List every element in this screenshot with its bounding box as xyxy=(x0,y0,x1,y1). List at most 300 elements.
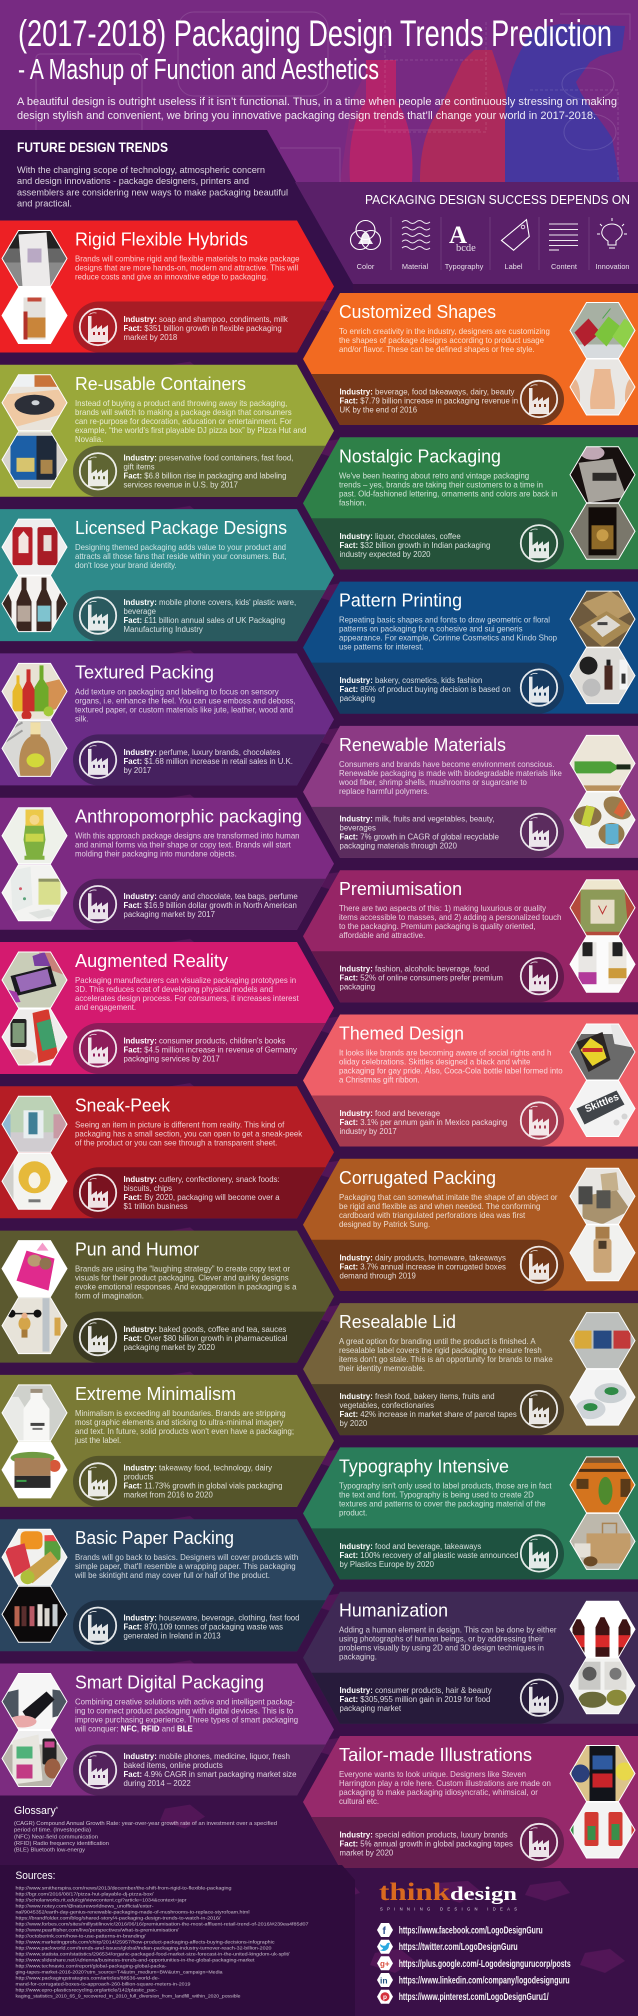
description: To enrich creativity in the industry, designers are customizing xyxy=(339,327,550,336)
description: of the product or you can see through a transparent sheet. xyxy=(75,1138,277,1147)
industry and fact xyxy=(124,748,293,775)
description: Renewable packaging is made with biodegradable materials like xyxy=(339,769,562,778)
heading: Themed Design xyxy=(339,1024,464,1044)
description: designed by Patrick Sung. xyxy=(339,1220,430,1229)
description: Brands are using the “laughing strategy” to create copy text or xyxy=(75,1265,290,1274)
icon: factory xyxy=(80,1030,116,1067)
industry and fact xyxy=(124,1464,282,1500)
description: a Christmas gift ribbon. xyxy=(339,1076,420,1084)
google plus: g+ xyxy=(380,1960,390,1968)
icon: factory xyxy=(521,1680,557,1716)
intro paragraph: design stylish and convenient, we bring you innovative packaging design trends that’ll change your world in 2017-2018. xyxy=(17,110,596,122)
icon: content xyxy=(549,224,578,271)
description xyxy=(339,471,557,507)
source links: http://www.slideshare.net/Adrienna/business-trends-and-opportunities-in-the-global-packaging-market xyxy=(16,1957,255,1962)
photo: coffee bags xyxy=(570,936,636,992)
industry and fact: packaging services by 2017 xyxy=(124,1054,220,1064)
icon: color xyxy=(350,220,380,271)
heading: sources: Sources: xyxy=(16,1870,56,1882)
panel: Pattern Printing xyxy=(303,582,638,714)
industry and fact xyxy=(124,454,293,490)
source links: http://www.pearlfisher.com/live/perspectives/what-is-premiumisation/ xyxy=(16,1927,179,1932)
industry and fact: Industry: baked goods, coffee and tea, sauces xyxy=(124,1325,286,1334)
photo: patterned box xyxy=(570,880,636,936)
industry and fact: Fact: 11.73% growth in global vials packaging xyxy=(124,1482,282,1491)
industry and fact: by Plastics Europe by 2020 xyxy=(340,1560,435,1569)
icon: factory xyxy=(521,958,557,994)
description: using photographs of human beings, or by addressing their xyxy=(339,1635,544,1644)
photo: beer bottles xyxy=(0,576,70,632)
icon: factory xyxy=(521,525,557,562)
photo: tall tan package xyxy=(570,1225,636,1281)
description: appearance. For example, Corinne Cosmetics and Kindo Shop xyxy=(339,634,558,643)
photo: fiber pods xyxy=(570,792,636,848)
description xyxy=(75,543,286,570)
photo: vinyl pizza box xyxy=(2,375,68,431)
panel: Corrugated Packing xyxy=(303,1159,638,1291)
photo: bottle in molded pulp xyxy=(570,735,636,791)
photo: black and gold box xyxy=(570,503,636,559)
source links: http://www.statista.com/statistics/296534/organic-packaged-food-market-size-forecast-in-the-united-kingdom-uk-split/ xyxy=(16,1951,290,1956)
industry and fact: Fact: $6.8 billion rise in packaging and labeling xyxy=(124,471,286,480)
icon: factory xyxy=(80,1319,116,1355)
text: future design trends intro xyxy=(17,164,288,208)
icon: factory xyxy=(521,1391,557,1427)
industry and fact: Fact: $1.68 million increase in retail sales in U.K. xyxy=(124,757,293,766)
panel: Sneak-Peek xyxy=(0,1086,334,1218)
description xyxy=(339,616,558,652)
panel: Themed Design xyxy=(303,1014,638,1146)
photo: white milk bottles xyxy=(2,1385,68,1441)
heading: Rigid Flexible Hybrids xyxy=(75,230,248,250)
industry and fact: Industry: houseware, beverage, clothing, fast food xyxy=(124,1614,299,1623)
description: textured paper, or custom materials like jute, leather, wood and xyxy=(75,705,293,714)
photo: yellow afro package xyxy=(2,1153,68,1209)
industry and fact: Industry: liquor, chocolates, coffee xyxy=(340,532,461,541)
heading: success factors: PACKAGING DESIGN SUCCESS DEPENDS ON xyxy=(365,193,630,207)
heading: Resealable Lid xyxy=(339,1312,456,1332)
industry and fact: vegetables, confectionaries xyxy=(340,1401,434,1410)
industry and fact: Industry: mobile phones, medicine, liquor, fresh xyxy=(124,1752,290,1761)
industry and fact: packaging xyxy=(340,694,375,703)
industry and fact: UK by the end of 2016 xyxy=(340,406,417,414)
description: A great option for branding until the product is finished. A xyxy=(339,1337,536,1346)
description: don't lose your brand identity. xyxy=(75,561,177,570)
industry and fact: biscuits, chips xyxy=(124,1184,172,1193)
photo: pouch on gradient xyxy=(2,230,68,286)
industry and fact: Manufacturing Industry xyxy=(124,625,203,634)
text: future design trends intro: and practical. xyxy=(17,198,72,208)
photo: cardboard cup carrier xyxy=(570,1168,636,1224)
description: packaging has a small section, you can open to get a sneak-peek xyxy=(75,1129,302,1138)
icon: factory xyxy=(80,742,116,778)
photo: nose-shaped packs xyxy=(570,359,636,415)
icon: label xyxy=(500,220,530,271)
panel: Customized Shapes xyxy=(303,293,638,425)
photo: juice packs xyxy=(570,302,636,358)
photo: bag on white xyxy=(2,288,68,344)
description: their identity memorable. xyxy=(339,1364,425,1373)
panel: Resealable Lid xyxy=(303,1303,638,1435)
description: Add texture on packaging and labeling to focus on sensory xyxy=(75,687,279,696)
icon: color: Color xyxy=(357,262,375,271)
description: will conquer: NFC, RFID and BLE xyxy=(74,1724,193,1734)
description: Instead of buying a product and throwing away its packaging, xyxy=(75,399,287,408)
heading: Smart Digital Packaging xyxy=(75,1672,264,1692)
industry and fact: Fact: $32 billion growth in Indian packaging xyxy=(340,541,490,550)
description xyxy=(75,254,300,282)
description: product. xyxy=(339,1508,367,1517)
panel: Extreme Minimalism xyxy=(0,1375,334,1507)
source links: http://www.packworld.com/trends-and-issues/global/indian-packaging-industry-turnover-reach-32-billion-2020 xyxy=(16,1945,272,1950)
industry and fact: Fact: £11 billion annual sales of UK Packaging xyxy=(124,616,285,625)
description: It looks like brands are becoming aware of social rights and h xyxy=(339,1048,551,1058)
photo: black and white skittles: Skittles xyxy=(584,1092,621,1115)
description: use patterns for interest. xyxy=(339,643,424,652)
description: can re-purpose for decoration, education or entertainment. For xyxy=(75,417,292,426)
panel: Humanization xyxy=(303,1592,638,1724)
panel: sources xyxy=(0,1865,355,2016)
source links: http://www.technavio.com/report/global-packaging-global-packa- xyxy=(16,1963,167,1968)
industry and fact: Fact: 3.1% per annum gain in Mexico packaging xyxy=(340,1118,507,1127)
text: future design trends intro: With the changing scope of technology, atmospheric concern xyxy=(17,164,265,175)
industry and fact xyxy=(340,1686,492,1713)
pinterest xyxy=(377,1990,549,2004)
panel: Typography Intensive xyxy=(303,1447,638,1579)
industry and fact: industry by 2017 xyxy=(340,1127,397,1136)
description xyxy=(75,832,300,859)
description xyxy=(339,1193,558,1229)
heading: Customized Shapes xyxy=(339,302,496,322)
heading: Renewable Materials xyxy=(339,735,506,755)
logo: think design: think xyxy=(379,1879,450,1906)
description: Consumers and brands have become environment conscious. xyxy=(339,760,554,769)
heading: Extreme Minimalism xyxy=(75,1384,236,1404)
description: past. Old-fashioned lettering, ornaments and colors are back in xyxy=(339,489,557,498)
industry and fact: $1 trillion business xyxy=(124,1202,188,1211)
description: affordable and attractive. xyxy=(339,931,425,940)
description: Brands will combine rigid and flexible materials to make package xyxy=(75,254,300,264)
icon: material xyxy=(402,220,430,271)
description: reduce costs and give an innovative edge to packaging. xyxy=(75,272,268,282)
photo: white lids xyxy=(570,1369,636,1425)
industry and fact: beverages xyxy=(340,824,376,833)
description: designs that are more hands-on, modern and attractive. This will xyxy=(75,264,298,272)
description xyxy=(339,327,550,354)
logo: think design: design xyxy=(450,1884,518,1905)
description: 3D. This reduces cost of developing physical models and xyxy=(75,985,273,994)
industry and fact: Fact: $351 billion growth in flexible packaging xyxy=(124,324,282,333)
photo: sandwich box xyxy=(2,1442,68,1498)
industry and fact: Industry: fresh food, bakery items, fruits and xyxy=(340,1392,495,1401)
industry and fact: Industry: food and beverage xyxy=(340,1109,440,1118)
photo: colored bottles xyxy=(2,663,68,720)
description: organs, i.e. enhance the feel. You can use emboss and deboss, xyxy=(75,696,296,705)
photo: framed boxes xyxy=(0,1096,68,1152)
background: purple header area xyxy=(0,0,638,182)
photo: paper takeaway bag xyxy=(570,1513,636,1569)
industry and fact xyxy=(340,532,490,559)
description: simple paper, that'll resemble a wrapping paper. This packaging xyxy=(75,1562,296,1571)
description: There are two aspects of this: 1) making luxurious or quality xyxy=(339,904,546,913)
industry and fact: Industry: perfume, luxury brands, chocolates xyxy=(124,748,280,757)
linkedin: in xyxy=(380,1976,388,1986)
description: replace harmful polymers. xyxy=(339,787,429,796)
panel: Anthropomorphic packaging xyxy=(0,798,334,930)
photo: hand with phone xyxy=(2,952,68,1008)
description xyxy=(74,1553,298,1580)
icon: typography: Typography xyxy=(445,262,484,271)
industry and fact: Fact: 4.9% CAGR in smart packaging market size xyxy=(124,1770,296,1779)
icon: innovation: Innovation xyxy=(595,262,630,271)
industry and fact: Fact: 52% of online consumers prefer premium xyxy=(340,974,503,983)
description: Packaging manufacturers can visualize packaging prototypes in xyxy=(75,976,296,985)
description: to the packaging. Premium packaging is quality oriented, xyxy=(339,922,536,931)
description xyxy=(74,1409,294,1445)
description: the shapes of package designs according to product usage xyxy=(339,336,545,345)
photo: three labeled trays xyxy=(570,1313,636,1369)
logo: think design xyxy=(379,1879,518,1912)
industry and fact xyxy=(124,1752,296,1788)
description xyxy=(74,1698,298,1734)
industry and fact: generated in Ireland in 2013 xyxy=(124,1632,221,1641)
industry and fact: Fact: 870,109 tonnes of packaging waste was xyxy=(124,1623,283,1632)
industry and fact: gift items xyxy=(124,462,155,471)
description: Combining creative solutions with active and intelligent packag- xyxy=(75,1698,295,1706)
industry and fact: by 2017 xyxy=(124,766,151,775)
icon: factory xyxy=(80,1608,116,1644)
industry and fact xyxy=(340,1253,506,1280)
industry and fact: Fact: $305,955 million gain in 2019 for food xyxy=(340,1695,490,1704)
photo: weightlifter boxes xyxy=(2,1298,68,1354)
industry and fact xyxy=(340,1830,513,1858)
source links: http://www.notey.com/@natureworldnews_unofficial/exter- xyxy=(16,1903,154,1908)
industry and fact: Industry: consumer products, children's books xyxy=(124,1036,285,1046)
description: Typography isn't only used to label products, those are in fact xyxy=(339,1481,552,1490)
description xyxy=(339,1770,551,1806)
industry and fact: Industry: beverage, food takeaways, dairy, beauty xyxy=(340,388,515,396)
description: visuals for their product packaging. Clever and quirky designs xyxy=(75,1274,289,1283)
industry and fact xyxy=(340,1109,507,1136)
industry and fact: Fact: 5% annual growth in global packaging tapes xyxy=(340,1840,513,1848)
industry and fact: packaging market xyxy=(340,1704,402,1713)
industry and fact xyxy=(340,1542,519,1569)
linkedin: https://www.linkedin.com/company/logodesignguru xyxy=(399,1976,570,1986)
icon: factory xyxy=(521,381,557,417)
icon: material: Material xyxy=(402,262,428,271)
industry and fact: Industry: takeaway food, technology, dairy xyxy=(124,1464,272,1473)
industry and fact: Industry: fashion, alcoholic beverage, food xyxy=(340,965,489,974)
industry and fact: Fact: Over $80 billion growth in pharmaceutical xyxy=(124,1334,288,1343)
source links: http://scholarworks.rit.edu/cgi/viewcontent.cgi?article=1034&context=japr xyxy=(16,1897,187,1902)
description: the text and font. Typography is being used to create 2D xyxy=(339,1490,534,1499)
description: improve purchasing experience. Three types of smart packaging xyxy=(75,1716,298,1724)
description: fashion. xyxy=(339,498,366,507)
industry and fact: beverage xyxy=(124,607,156,616)
text: future design trends intro: and design innovations - package designers, printers and xyxy=(17,175,249,186)
description xyxy=(75,976,299,1012)
source links xyxy=(16,1885,309,1998)
description: Everyone wants to look unique. Designers like Steven xyxy=(339,1770,526,1779)
description: evoke emotional responses. And exaggeration in packaging is a xyxy=(75,1283,297,1292)
description: Repeating basic shapes and fonts to draw geometric or floral xyxy=(339,616,550,625)
industry and fact xyxy=(340,388,518,414)
description xyxy=(75,687,296,723)
photo: blue and navy boxes xyxy=(2,432,68,488)
industry and fact: baked items, online products xyxy=(124,1761,223,1770)
icon: factory xyxy=(80,453,116,490)
intro paragraph: A beautiful design is outright useless if it isn’t functional. Thus, in a time when people are continuously stressing on making xyxy=(17,96,617,108)
description: patterns on packaging for a cohesive and sui generis xyxy=(339,625,523,634)
source links: http://www.epro-plasticsrecycling.org/article/142/plastic_pac- xyxy=(16,1987,158,1992)
facebook xyxy=(377,1923,543,1937)
industry and fact: Industry: cutlery, confectionery, snack foods: xyxy=(124,1175,280,1184)
heading: Nostalgic Packaging xyxy=(339,446,501,466)
photo: fruit paper wraps xyxy=(2,1529,68,1585)
industry and fact: market from 2016 to 2020 xyxy=(124,1491,213,1500)
industry and fact xyxy=(124,892,298,919)
description: Adding a human element in design. This can be done by either xyxy=(339,1626,557,1635)
panel: Premiumisation xyxy=(303,870,638,1002)
source links: http://bgr.com/2016/08/17/pizza-hut-playable-dj-pizza-box/ xyxy=(16,1891,154,1896)
description: Harrington play a role here. Custom illustrations are made on xyxy=(339,1779,551,1788)
photo: orange typographic cartons xyxy=(570,1457,636,1513)
icon: innovation xyxy=(595,218,630,271)
industry and fact xyxy=(124,1036,297,1064)
industry and fact: market by 2020 xyxy=(340,1848,394,1858)
description: and engagement. xyxy=(75,1003,136,1012)
source links: http://octoberink.com/how-to-use-patterns-in-branding/ xyxy=(16,1933,146,1938)
subtitle: - A Mashup of Function and Aesthetics xyxy=(18,54,379,86)
description: Minimalism is exceeding all boundaries. Brands are stripping xyxy=(75,1409,286,1418)
icon: factory xyxy=(80,597,116,634)
industry and fact: Industry: special edition products, luxury brands xyxy=(340,1830,508,1840)
description: Novalia. xyxy=(75,435,103,444)
description: cardboard with triangulated perforations idea was first xyxy=(339,1211,526,1220)
industry and fact: Fact: $16.9 billion dollar growth in North American xyxy=(124,901,297,910)
industry and fact: Fact: 100% recovery of all plastic waste announced xyxy=(340,1551,519,1560)
description xyxy=(339,1048,563,1084)
industry and fact xyxy=(340,1392,517,1428)
panel: Re-usable Containers xyxy=(0,365,334,497)
heading: Anthropomorphic packaging xyxy=(75,807,302,827)
industry and fact: services revenue in U.S. by 2017 xyxy=(124,480,238,489)
industry and fact: packaging market by 2020 xyxy=(124,1343,216,1352)
industry and fact: Fact: $4.5 million increase in revenue of Germany xyxy=(124,1046,297,1054)
description: problems visually by using 2D and 3D design techniques in xyxy=(339,1644,544,1653)
icon: factory xyxy=(521,669,557,706)
photo: black and white skittles xyxy=(570,1080,636,1136)
description xyxy=(339,904,561,940)
industry and fact: during 2014 – 2022 xyxy=(124,1779,191,1788)
description: We've been hearing about retro and vintage packaging xyxy=(339,471,529,480)
photo: illustrated can xyxy=(570,1746,636,1802)
panel: Basic Paper Packing xyxy=(0,1519,334,1651)
icon: content: Content xyxy=(551,262,577,271)
description: packaging to make packaging idiosyncratic, whimsical, or xyxy=(339,1788,538,1797)
glossary: period of time. (Investopedia) xyxy=(14,1828,91,1834)
panel: future design trends xyxy=(0,130,353,300)
heading: Premiumisation xyxy=(339,879,462,899)
photo: hand with phone in store xyxy=(2,1730,68,1786)
description: example, “the world's first playable DJ pizza box” by Pizza Hut and xyxy=(75,426,306,435)
glossary: (CAGR) Compound Annual Growth Rate: year-over-year growth rate of an investment over a specified xyxy=(14,1821,277,1827)
industry and fact: demand through 2019 xyxy=(340,1271,416,1280)
industry and fact xyxy=(340,676,511,703)
description: accelerates design process. For consumers, it increases interest xyxy=(75,994,299,1003)
glossary: (RFID) Radio frequency identification xyxy=(14,1841,109,1847)
industry and fact: industry expected by 2020 xyxy=(340,550,431,559)
description: Brands will go back to basics. Designers will cover products with xyxy=(75,1553,298,1562)
industry and fact: packaging materials through 2020 xyxy=(340,842,458,851)
heading: Sneak-Peek xyxy=(75,1095,171,1115)
description: oliday celebrations. Skittles designed a black and white xyxy=(339,1058,531,1066)
description: Seeing an item in picture is different from reality. This kind of xyxy=(75,1120,285,1129)
icon: factory xyxy=(80,1752,116,1788)
description: silk. xyxy=(75,714,89,723)
source links: mand-for-corrugated-boxes-to-approach-260-billion-square-meters-in-2019 xyxy=(16,1981,191,1986)
panel: Renewable Materials xyxy=(303,726,638,858)
icon: factory xyxy=(521,1102,557,1139)
panel: Textured Packing xyxy=(0,653,334,785)
source links: http://www.smitherspira.com/news/2013/december/the-shift-from-rigid-to-flexible-packaging xyxy=(16,1885,232,1890)
industry and fact: Industry: preservative food containers, fast food, xyxy=(124,453,293,462)
industry and fact: Industry: mobile phone covers, kids' plastic ware, xyxy=(124,598,296,607)
photo: cola bottles xyxy=(570,1601,636,1657)
industry and fact xyxy=(340,965,503,992)
pinterest: p xyxy=(383,1994,387,2001)
industry and fact: Fact: 42% increase in market share of parcel tapes xyxy=(340,1410,517,1419)
description xyxy=(339,1337,553,1373)
description: and animal forms via their shape or copy text. Brands will start xyxy=(75,841,292,850)
description xyxy=(338,760,562,796)
industry and fact: Fact: $7.79 billion increase in packaging revenue in xyxy=(340,396,518,406)
industry and fact: Fact: 7% growth in CAGR of global recyclable xyxy=(340,833,499,842)
panel: Pun and Humor xyxy=(0,1231,334,1363)
intro paragraph xyxy=(17,96,617,122)
industry and fact: market by 2018 xyxy=(124,333,177,342)
panel: Nostalgic Packaging xyxy=(303,437,638,569)
industry and fact: Fact: By 2020, packaging will become over a xyxy=(124,1193,280,1202)
industry and fact: Industry: milk, fruits and vegetables, beauty, xyxy=(340,815,494,824)
photo: pink bread bag xyxy=(2,1241,68,1297)
industry and fact xyxy=(340,815,499,851)
icon: typography: A xyxy=(449,222,467,249)
heading: Pattern Printing xyxy=(339,591,462,611)
icon: factory xyxy=(521,814,557,850)
industry and fact: Industry: bakery, cosmetics, kids fashion xyxy=(340,676,482,685)
glossary: (NFC) Near-field communication xyxy=(14,1834,98,1840)
description: textures and patterns to cover the packaging material of the xyxy=(339,1499,546,1508)
description: form of imagination. xyxy=(75,1292,144,1301)
text: future design trends intro: assemblers are considering new ways to make packaging beautiful xyxy=(17,186,288,198)
heading: future design trends: FUTURE DESIGN TRENDS xyxy=(17,140,168,155)
description: will be skintight and may cover full or half of the product. xyxy=(74,1571,270,1580)
heading: Typography Intensive xyxy=(339,1456,509,1476)
photo: soap bars xyxy=(570,591,636,647)
photo: tea bag and glass xyxy=(2,865,68,921)
description: brands will switch to making a package design that consumers xyxy=(75,408,292,417)
panel: Smart Digital Packaging xyxy=(0,1664,334,1796)
icon: factory xyxy=(521,1824,557,1860)
industry and fact: Fact: 85% of product buying decision is based on xyxy=(340,685,511,694)
industry and fact xyxy=(124,1614,299,1641)
description: cultural etc. xyxy=(339,1797,379,1806)
twitter xyxy=(377,1940,518,1954)
description xyxy=(75,399,306,444)
photo: character bottle xyxy=(2,808,68,864)
source links: ging-tapes-market-2016-2020?utm_source=T4&utm_medium=BW&utm_campaign=Media xyxy=(16,1969,223,1974)
